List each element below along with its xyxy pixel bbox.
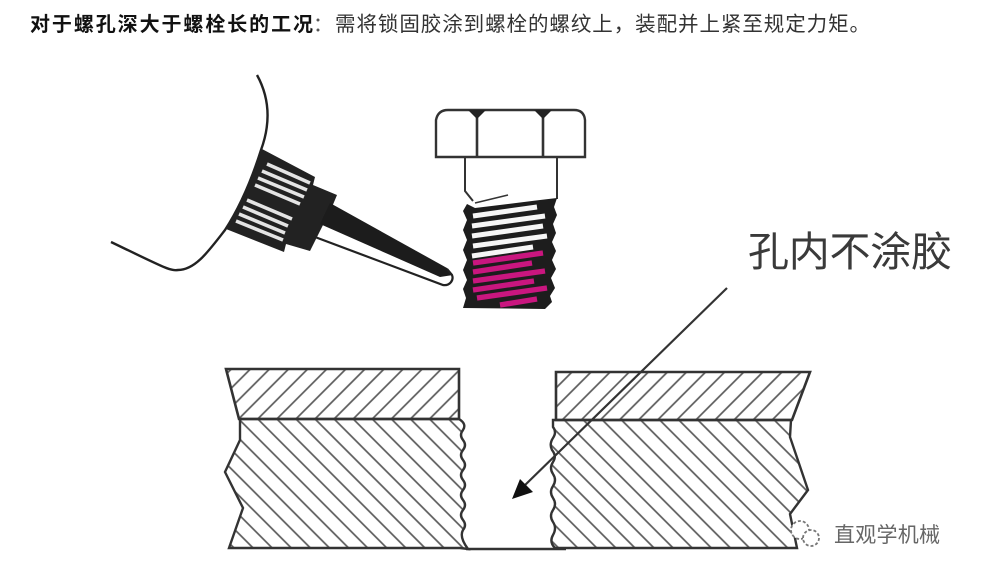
bottle cap — [226, 149, 337, 252]
arrow to hole — [512, 288, 727, 499]
right upper plate — [556, 372, 810, 420]
nozzle — [315, 203, 453, 285]
instruction text: 需将锁固胶涂到螺栓的螺纹上，装配并上紧至规定力矩。 — [335, 13, 870, 36]
instruction text: ： — [313, 14, 333, 36]
right lower plate — [551, 420, 808, 548]
bolt shank — [465, 157, 557, 201]
left upper plate — [226, 369, 459, 419]
left lower plate — [225, 419, 468, 549]
watermark — [791, 521, 940, 547]
bolt head — [436, 110, 585, 157]
watermark text: 直观学机械 — [834, 524, 940, 547]
bolt thread — [463, 198, 557, 309]
instruction text: 对于螺孔深大于螺栓长的工况 — [30, 13, 313, 36]
label: no glue inside hole: 孔内不涂胶 — [748, 229, 952, 275]
adhesive on thread — [473, 253, 547, 305]
icon: glue bottle — [111, 75, 453, 285]
icon: wechat logo — [791, 521, 819, 546]
right plate — [551, 372, 810, 548]
icon: hex bolt — [436, 110, 585, 309]
left plate — [225, 369, 468, 549]
hole bottom — [466, 548, 566, 550]
instruction text — [30, 13, 870, 36]
bottle body outline — [111, 75, 268, 270]
